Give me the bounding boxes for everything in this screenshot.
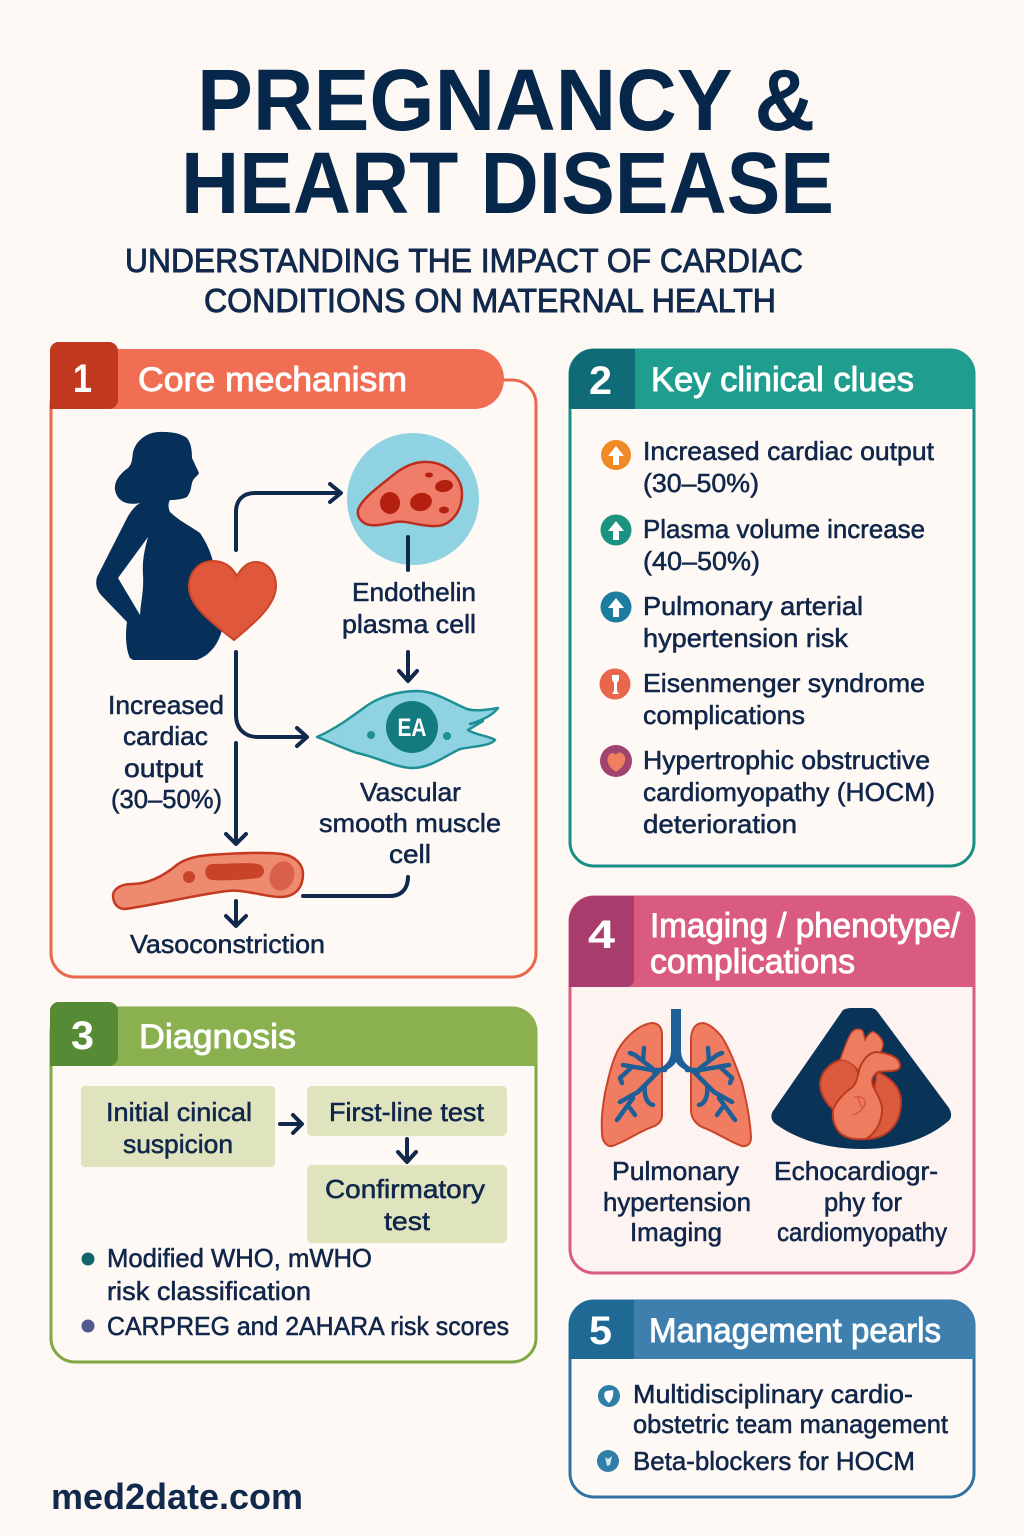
title bbox=[181, 52, 834, 232]
clue: hypertrophic obstructive cardiomyopathy bbox=[600, 745, 935, 839]
label: increased cardiac output: (30–50%) bbox=[111, 784, 222, 814]
label: pulmonary hypertension imaging: Imaging bbox=[630, 1217, 722, 1247]
clue: plasma volume increase: (40–50%) bbox=[643, 546, 760, 576]
header: management pearls: 5 bbox=[589, 1309, 612, 1353]
label: vasoconstriction: Vasoconstriction bbox=[130, 929, 325, 959]
connector: smooth muscle cell to muscle cell bbox=[303, 877, 408, 896]
box: confirmatory test bbox=[307, 1165, 507, 1243]
label: endothelin plasma cell: Endothelin bbox=[352, 577, 476, 607]
label: pulmonary hypertension imaging: Pulmonary bbox=[612, 1156, 739, 1186]
label: echocardiography for cardiomyopathy: Echocardiogr- bbox=[774, 1156, 938, 1186]
clue: plasma volume increase: Plasma volume increase bbox=[643, 514, 925, 544]
pearl: multidisciplinary team bbox=[598, 1379, 949, 1439]
icon: pregnant woman silhouette bbox=[96, 432, 222, 660]
arrow: heart to smooth muscle cell bbox=[236, 652, 307, 746]
clue: hypertrophic obstructive cardiomyopathy: cardiomyopathy (HOCM) bbox=[643, 777, 935, 807]
connector line under endothelin cell bbox=[406, 537, 410, 570]
header: management pearls: Management pearls bbox=[649, 1312, 941, 1350]
panel: key clinical clues bbox=[569, 349, 975, 866]
clue: pulmonary arterial hypertension: hypertension risk bbox=[643, 623, 849, 653]
box: confirmatory test: test bbox=[384, 1206, 431, 1236]
arrow: down to vasoconstriction bbox=[226, 901, 246, 926]
label: increased cardiac output: cardiac bbox=[123, 721, 208, 751]
subtitle: UNDERSTANDING THE IMPACT OF CARDIAC bbox=[125, 242, 803, 279]
header: imaging: 4 bbox=[588, 913, 616, 957]
label: endothelin plasma cell: plasma cell bbox=[342, 609, 476, 639]
header: imaging: Imaging / phenotype/ bbox=[650, 907, 961, 945]
header: key clinical clues: Key clinical clues bbox=[651, 361, 914, 399]
subtitle: CONDITIONS ON MATERNAL HEALTH bbox=[204, 282, 776, 319]
clue: pulmonary arterial hypertension bbox=[600, 591, 863, 653]
header: core mechanism bbox=[50, 342, 504, 409]
clue: pulmonary arterial hypertension: Pulmonary arterial bbox=[643, 591, 863, 621]
pearl: multidisciplinary team: obstetric team management bbox=[633, 1409, 949, 1439]
header: core mechanism: Core mechanism bbox=[138, 361, 407, 399]
header: core mechanism: 1 bbox=[73, 357, 92, 401]
clue: eisenmenger syndrome: Eisenmenger syndrome bbox=[643, 668, 925, 698]
clue: hypertrophic obstructive cardiomyopathy: Hypertrophic obstructive bbox=[643, 745, 930, 775]
icon: heart bbox=[189, 561, 276, 640]
bullet: modified WHO: Modified WHO, mWHO bbox=[107, 1243, 372, 1273]
panel: imaging phenotype complications bbox=[569, 896, 975, 1273]
label: vascular smooth muscle cell: cell bbox=[389, 839, 431, 869]
box: initial clinical suspicion: Initial cinical bbox=[106, 1097, 252, 1127]
label: pulmonary hypertension imaging bbox=[603, 1156, 751, 1247]
pearl: multidisciplinary team: Multidisciplinary cardio- bbox=[633, 1379, 913, 1409]
footer: med2date.com: med2date.com bbox=[51, 1476, 303, 1517]
bullet: modified WHO bbox=[82, 1243, 372, 1306]
header: key clinical clues bbox=[569, 349, 975, 409]
clue: increased cardiac output: Increased cardiac output bbox=[643, 436, 935, 466]
icon: vascular smooth muscle cell: EA bbox=[398, 714, 426, 742]
label: pulmonary hypertension imaging: hypertension bbox=[603, 1187, 751, 1217]
subtitle bbox=[125, 242, 803, 319]
label: endothelin plasma cell bbox=[342, 577, 476, 639]
header: diagnosis: Diagnosis bbox=[139, 1018, 296, 1056]
panel: diagnosis bbox=[50, 1002, 537, 1362]
label: echocardiography for cardiomyopathy: cardiomyopathy bbox=[777, 1217, 947, 1247]
box: first-line test bbox=[307, 1086, 507, 1136]
clue: eisenmenger syndrome bbox=[600, 668, 925, 730]
clue: plasma volume increase bbox=[600, 514, 925, 576]
box: first-line test: First-line test bbox=[329, 1097, 485, 1127]
clue: increased cardiac output bbox=[601, 436, 935, 498]
box: initial clinical suspicion: suspicion bbox=[123, 1129, 233, 1159]
arrow: down to red cell bbox=[226, 743, 246, 844]
header: imaging bbox=[569, 896, 975, 987]
title: HEART DISEASE bbox=[181, 135, 834, 232]
header: diagnosis: 3 bbox=[71, 1014, 94, 1058]
icon: echocardiogram heart bbox=[771, 1008, 951, 1149]
icon: contracted muscle cell bbox=[113, 853, 303, 909]
icon: endothelin plasma cell bbox=[347, 433, 479, 565]
arrow: heart to endothelin cell bbox=[236, 484, 341, 550]
header: diagnosis bbox=[50, 1002, 537, 1066]
clue: hypertrophic obstructive cardiomyopathy: deterioration bbox=[643, 809, 797, 839]
title: PREGNANCY & bbox=[197, 52, 815, 149]
header: imaging: complications bbox=[650, 943, 855, 981]
icon: lungs bbox=[602, 1009, 751, 1146]
label: echocardiography for cardiomyopathy bbox=[774, 1156, 947, 1247]
label: increased cardiac output bbox=[108, 690, 224, 814]
label: increased cardiac output: output bbox=[124, 753, 204, 783]
panel: management pearls bbox=[569, 1300, 975, 1497]
clue: increased cardiac output: (30–50%) bbox=[643, 468, 759, 498]
clue: eisenmenger syndrome: complications bbox=[643, 700, 805, 730]
header: management pearls bbox=[569, 1300, 975, 1359]
label: vascular smooth muscle cell bbox=[319, 777, 501, 869]
arrow: down to smooth muscle cell bbox=[399, 652, 417, 681]
box: initial clinical suspicion bbox=[81, 1086, 275, 1167]
label: vascular smooth muscle cell: smooth muscle bbox=[319, 808, 501, 838]
label: vascular smooth muscle cell: Vascular bbox=[360, 777, 461, 807]
label: increased cardiac output: Increased bbox=[108, 690, 224, 720]
label: echocardiography for cardiomyopathy: phy for bbox=[824, 1187, 902, 1217]
pearl: beta-blockers: Beta-blockers for HOCM bbox=[633, 1446, 915, 1476]
bullet: CARPREG: CARPREG and 2AHARA risk scores bbox=[107, 1311, 509, 1341]
icon: vascular smooth muscle cell bbox=[317, 691, 498, 768]
arrow: suspicion to first-line test bbox=[280, 1115, 302, 1133]
box: confirmatory test: Confirmatory bbox=[325, 1174, 485, 1204]
header: key clinical clues: 2 bbox=[589, 359, 612, 403]
arrow: first-line to confirmatory test bbox=[398, 1139, 416, 1162]
bullet: modified WHO: risk classification bbox=[107, 1276, 311, 1306]
panel: core mechanism bbox=[50, 342, 536, 977]
